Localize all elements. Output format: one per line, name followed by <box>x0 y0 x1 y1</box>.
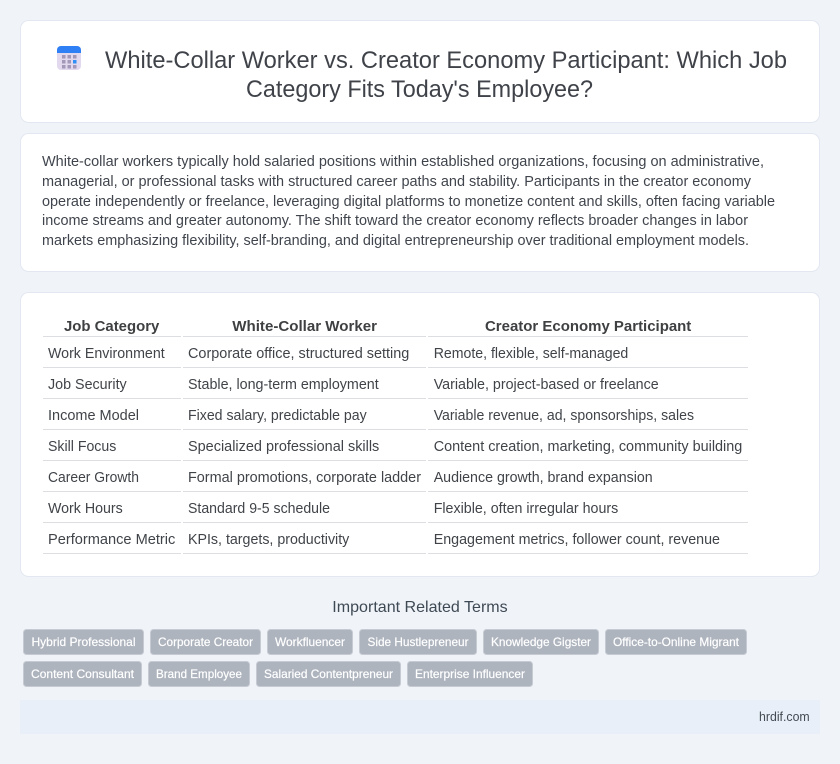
tag: side hustlepreneur: Side Hustlepreneur <box>368 635 468 649</box>
title: White-Collar Worker vs. Creator Economy Participant: Which Job <box>105 47 787 74</box>
text block: description: income streams and greater autonomy. The shift toward the creator economy reflects broader changes in labor <box>42 213 748 229</box>
table row: skill focus: Specialized professional skills <box>188 439 379 455</box>
table row: skill focus <box>43 439 748 461</box>
panel: description <box>20 134 820 272</box>
tag: office-to-online migrant: Office-to-Online Migrant <box>613 635 740 649</box>
tag: office-to-online migrant <box>606 630 746 654</box>
footer <box>20 700 820 734</box>
table row: job security <box>43 377 748 399</box>
tag: side hustlepreneur <box>360 630 476 654</box>
table header: Job Category <box>64 319 159 335</box>
tag: knowledge gigster <box>484 630 598 654</box>
table row: work environment <box>43 346 748 368</box>
title <box>105 47 787 103</box>
heading: important related terms: Important Related Terms <box>332 599 508 616</box>
table row: work hours: Work Hours <box>48 501 123 517</box>
table row: work hours: Standard 9-5 schedule <box>188 501 330 517</box>
text block: description: managerial, or professional tasks with structured career paths and stability. Participants in the creator economy <box>42 174 752 190</box>
table row: income model: Fixed salary, predictable pay <box>188 408 367 424</box>
icon: calendar <box>57 46 81 70</box>
table row: work hours: Flexible, often irregular hours <box>434 501 618 517</box>
tag: salaried contentpreneur: Salaried Contentpreneur <box>264 667 393 681</box>
table row: skill focus: Skill Focus <box>48 439 116 455</box>
text block: description: operate independently or freelance, leveraging digital platforms to monetize content and skills, often facing variable <box>42 194 775 210</box>
tag: salaried contentpreneur <box>256 662 400 686</box>
table row: job security: Job Security <box>48 377 127 393</box>
table row: work environment: Corporate office, structured setting <box>188 346 409 362</box>
table header: White-Collar Worker <box>232 319 377 335</box>
table row: performance metric <box>43 532 748 554</box>
tag: workfluencer <box>268 630 352 654</box>
tag: content consultant <box>24 662 142 686</box>
table row: performance metric: KPIs, targets, productivity <box>188 532 350 548</box>
table row: career growth: Audience growth, brand expansion <box>434 470 653 486</box>
table header <box>43 319 748 337</box>
table row: work environment: Remote, flexible, self-managed <box>434 346 628 362</box>
tag: knowledge gigster: Knowledge Gigster <box>491 635 591 649</box>
table row: income model <box>43 408 748 430</box>
tag: corporate creator <box>150 630 260 654</box>
table row: work environment: Work Environment <box>48 346 165 362</box>
table row: income model: Income Model <box>48 408 139 424</box>
footer: hrdif.com <box>759 709 810 724</box>
tag: hybrid professional <box>24 630 144 654</box>
table row: job security: Stable, long-term employment <box>188 377 379 393</box>
panel: title header <box>20 20 820 122</box>
tag: hybrid professional: Hybrid Professional <box>32 635 136 649</box>
text block: description: markets emphasizing flexibility, self-branding, and digital entrepreneurship over traditional employment models. <box>42 233 749 249</box>
table row: career growth: Formal promotions, corporate ladder <box>188 470 421 486</box>
tag: content consultant: Content Consultant <box>31 667 135 681</box>
title: Category Fits Today's Employee? <box>246 76 593 103</box>
table row: career growth <box>43 470 748 492</box>
table row: income model: Variable revenue, ad, sponsorships, sales <box>434 408 694 424</box>
tag: brand employee: Brand Employee <box>156 667 242 681</box>
tag: brand employee <box>148 662 250 686</box>
table row: job security: Variable, project-based or freelance <box>434 377 659 393</box>
table row: work hours <box>43 501 748 523</box>
text block: description <box>42 154 775 249</box>
text block: description: White-collar workers typically hold salaried positions within established organizations, focusing on administrative, <box>42 154 764 170</box>
table row: performance metric: Performance Metric <box>48 532 175 548</box>
tag: workfluencer: Workfluencer <box>275 635 345 649</box>
tag: enterprise influencer: Enterprise Influencer <box>415 667 525 681</box>
panel: comparison table <box>20 292 820 576</box>
tag: corporate creator: Corporate Creator <box>158 635 253 649</box>
table row: skill focus: Content creation, marketing, community building <box>434 439 742 455</box>
tags: related terms <box>24 630 746 686</box>
table header: Creator Economy Participant <box>485 319 692 335</box>
tag: enterprise influencer <box>408 662 532 686</box>
table row: performance metric: Engagement metrics, follower count, revenue <box>434 532 720 548</box>
table row: career growth: Career Growth <box>48 470 139 486</box>
